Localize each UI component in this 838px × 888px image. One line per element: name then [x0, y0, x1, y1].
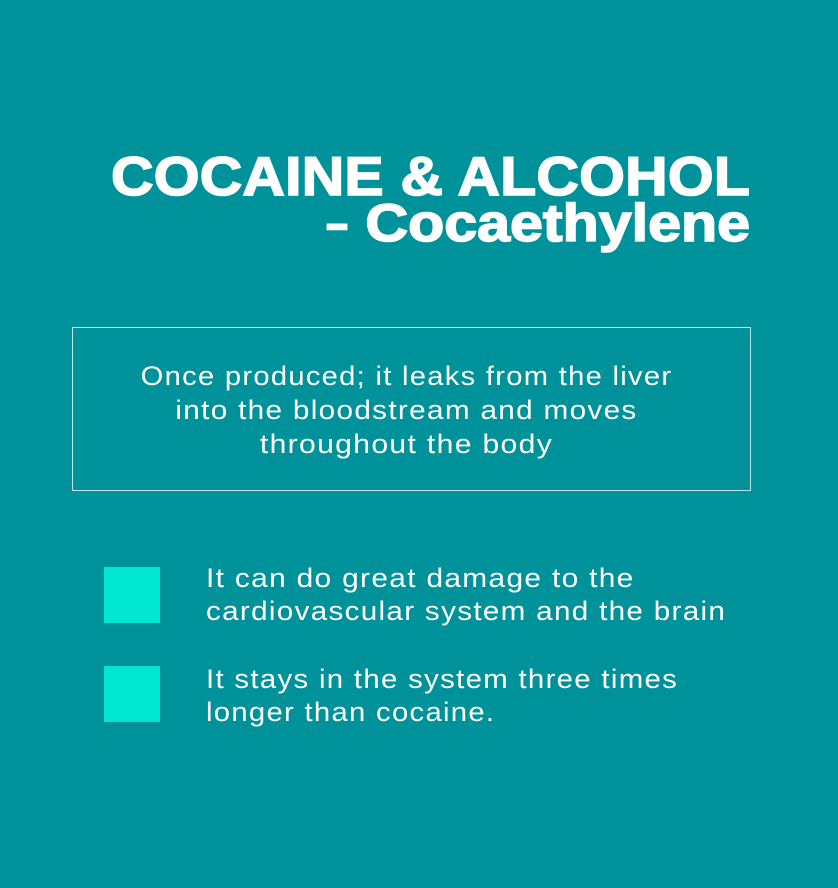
callout text: Once produced; it leaks from the liver: [141, 361, 672, 391]
bullet text 2: longer than cocaine.: [206, 697, 495, 727]
icon: square bullet 2: [104, 666, 160, 722]
callout text: into the bloodstream and moves: [175, 395, 638, 425]
title: –: [326, 194, 348, 253]
bullet text 1: It can do great damage to the: [206, 563, 635, 593]
bullet text 1: [206, 563, 726, 626]
callout box: [72, 327, 751, 491]
title: COCAINE & ALCOHOL: [111, 145, 750, 207]
bullet text 2: [206, 664, 678, 727]
bullet text 1: cardiovascular system and the brain: [206, 596, 726, 626]
callout text: [141, 361, 672, 459]
icon: square bullet 1: [104, 567, 160, 623]
bullet text 2: It stays in the system three times: [206, 664, 678, 694]
title: [111, 145, 750, 253]
callout text: throughout the body: [260, 429, 553, 459]
title: Cocaethylene: [365, 194, 750, 253]
